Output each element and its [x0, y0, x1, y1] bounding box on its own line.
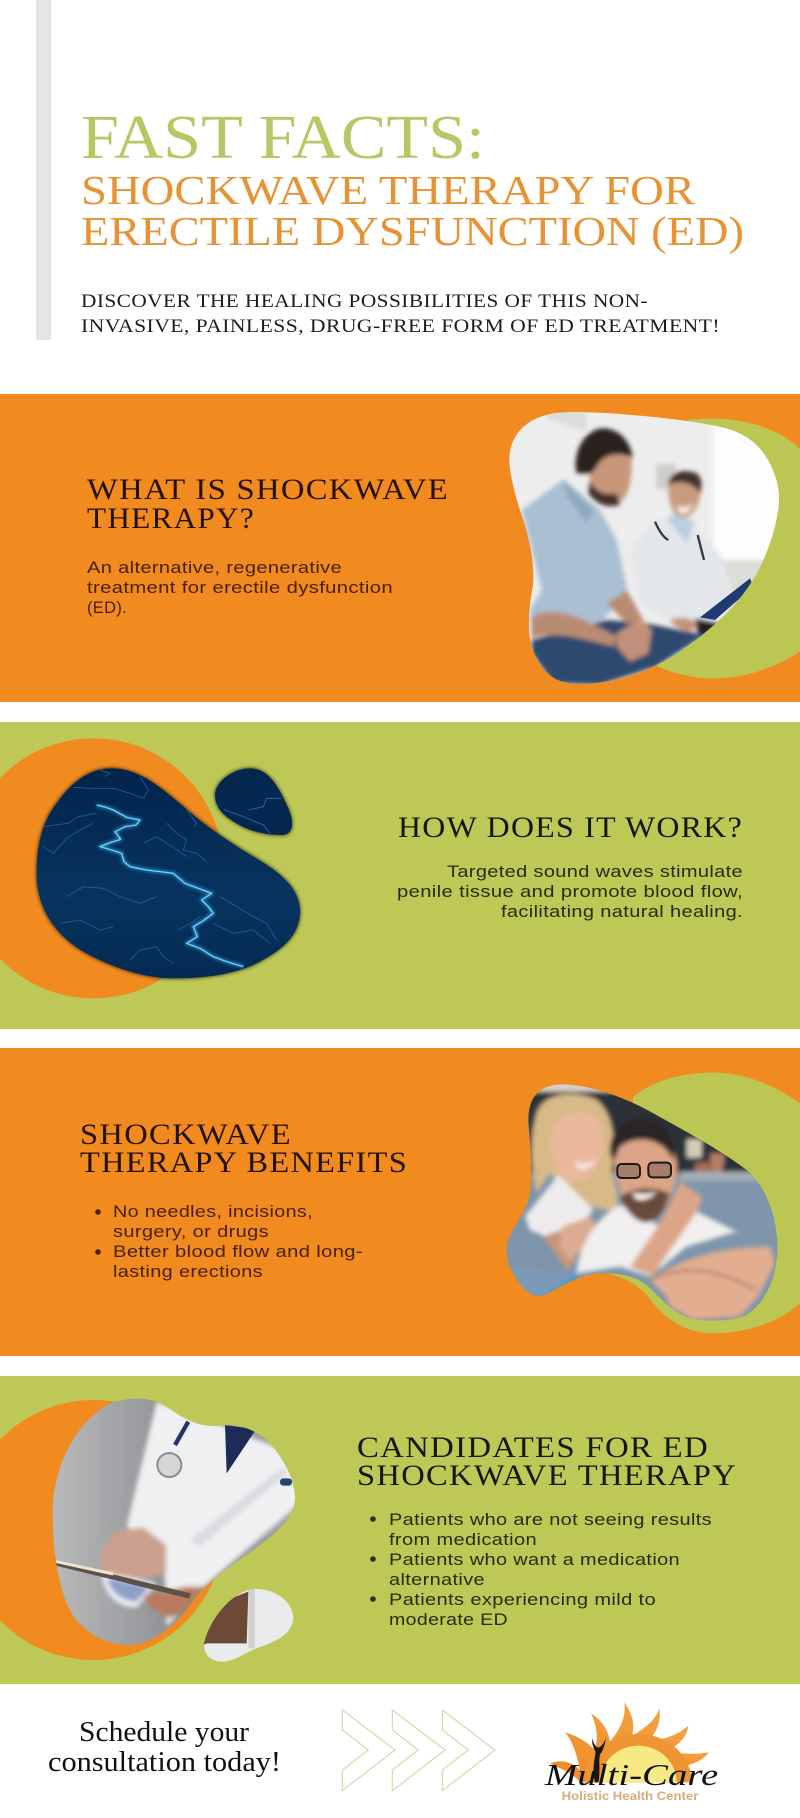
intro text: DISCOVER THE HEALING POSSIBILITIES OF THIS NON-: [81, 291, 648, 312]
body text: facilitating natural healing.: [501, 903, 743, 921]
heading: [357, 1431, 737, 1492]
body text: (ED).: [87, 599, 127, 617]
bullet list: surgery, or drugs: [113, 1223, 269, 1241]
heading: [80, 1118, 408, 1179]
logo: Multi-Care Holistic Health Center: Multi-Care: [544, 1758, 718, 1792]
photo: patient and doctor with green blob: [500, 407, 800, 690]
body text: penile tissue and promote blood flow,: [397, 883, 743, 901]
intro text: INVASIVE, PAINLESS, DRUG-FREE FORM OF ED TREATMENT!: [81, 316, 720, 337]
heading: HOW DOES IT WORK?: [398, 811, 743, 844]
arrows: three outlined chevrons: [342, 1710, 495, 1791]
heading: subject line 1: SHOCKWAVE THERAPY FOR: [81, 167, 696, 213]
bullet list: Better blood flow and long-: [113, 1243, 363, 1261]
heading: fast facts: FAST FACTS:: [81, 104, 485, 172]
body text: An alternative, regenerative: [87, 559, 342, 577]
title block: [81, 104, 744, 254]
bullet list: [370, 1511, 712, 1629]
body text: [397, 863, 743, 921]
intro text: [81, 291, 720, 337]
heading: [87, 473, 449, 535]
heading: SHOCKWAVE THERAPY: [357, 1459, 737, 1492]
call to action text: [48, 1717, 281, 1778]
heading: THERAPY BENEFITS: [80, 1146, 408, 1179]
bullet list: moderate ED: [389, 1611, 508, 1629]
bullet list: alternative: [389, 1571, 485, 1589]
panel: what is shockwave therapy: [0, 394, 800, 702]
heading: CANDIDATES FOR ED: [357, 1431, 709, 1464]
image: glowing blood vessels in blobs: [0, 738, 303, 998]
logo: Multi-Care Holistic Health Center: Holistic Health Center: [562, 1789, 699, 1803]
body text: [87, 559, 393, 617]
call to action text: consultation today!: [48, 1747, 281, 1778]
bullet list: Patients who want a medication: [389, 1551, 680, 1569]
header accent bar: [36, 0, 51, 340]
bullet list: [95, 1203, 363, 1281]
bullet list: Patients experiencing mild to: [389, 1591, 656, 1609]
body text: Targeted sound waves stimulate: [447, 863, 743, 881]
heading: subject line 2: ERECTILE DYSFUNCTION (ED): [81, 208, 744, 254]
heading: WHAT IS SHOCKWAVE: [87, 473, 449, 506]
logo: Multi-Care Holistic Health Center: [544, 1702, 718, 1803]
body text: treatment for erectile dysfunction: [87, 579, 393, 597]
panel: candidates for ED shockwave therapy: [0, 1376, 800, 1684]
panel: how does it work: [0, 722, 800, 1029]
panel: shockwave therapy benefits: [0, 1048, 800, 1356]
heading: SHOCKWAVE: [80, 1118, 292, 1151]
bullet list: from medication: [389, 1531, 537, 1549]
heading: THERAPY?: [87, 502, 255, 535]
photo: smiling couple with green blob: [500, 1073, 800, 1333]
call to action text: Schedule your: [79, 1717, 250, 1748]
bullet list: Patients who are not seeing results: [389, 1511, 712, 1529]
bullet list: No needles, incisions,: [113, 1203, 313, 1221]
photo: doctor using tablet in blobs: [0, 1393, 300, 1665]
bullet list: lasting erections: [113, 1263, 263, 1281]
